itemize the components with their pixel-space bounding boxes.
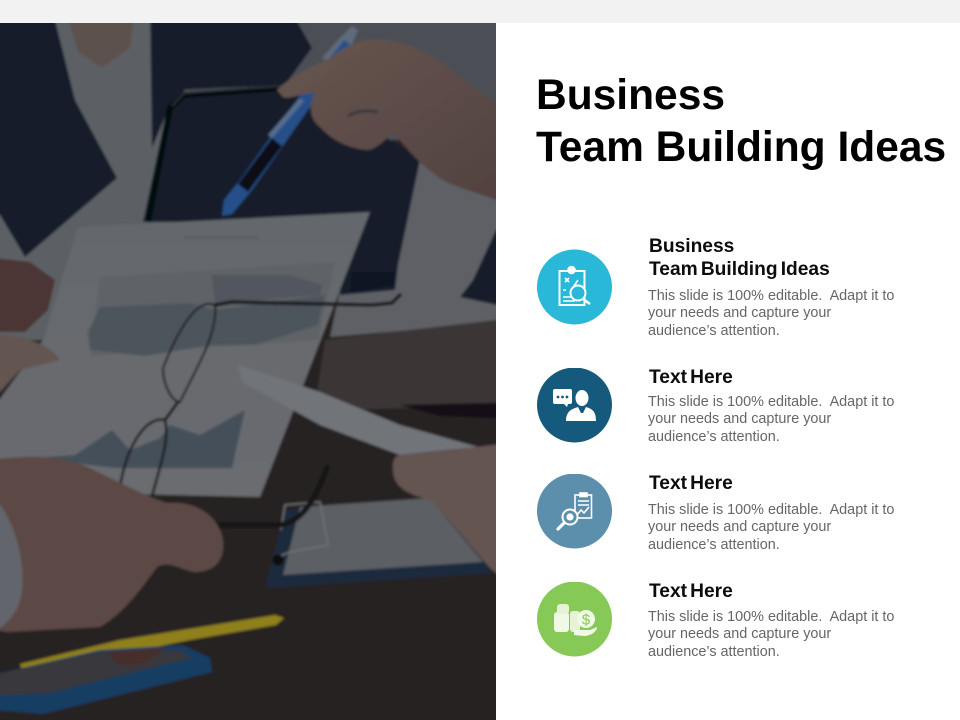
item 1: body text [648, 288, 894, 338]
item 2: body text [648, 394, 894, 444]
lower left hand [0, 457, 223, 632]
document paper with charts [0, 212, 370, 497]
item 1: body text: your needs and capture your [648, 305, 831, 321]
item 3: body text: audience’s attention. [648, 536, 780, 552]
upper right hand [277, 39, 530, 215]
smartphone [0, 645, 212, 714]
item 4: icon circle with coins and hand [537, 582, 612, 656]
item 1: heading: Business [649, 236, 734, 257]
photo background [0, 0, 530, 720]
item 1: icon circle with clipboard and magnifier [537, 250, 612, 324]
item 4: body text [648, 608, 894, 660]
item 2: body text: audience’s attention. [648, 428, 780, 444]
top band [0, 0, 960, 23]
item 1: heading [649, 236, 830, 280]
item 3: body text: your needs and capture your [648, 519, 831, 535]
yellow pencil [20, 615, 284, 670]
suit jacket [0, 0, 530, 312]
lower right hand [393, 440, 530, 590]
item 3: icon circle with report and magnifier [537, 474, 612, 548]
item 3: heading: Text Here [649, 473, 733, 494]
item 3: body text: This slide is 100% editable. Adapt it to [648, 502, 894, 518]
title: Business [536, 72, 725, 118]
pen [222, 26, 358, 216]
item 2: body text: your needs and capture your [648, 411, 831, 427]
title [536, 72, 946, 170]
item 2: body text: This slide is 100% editable. Adapt it to [648, 394, 894, 410]
item 4: body text: your needs and capture your [648, 626, 831, 642]
item 2: icon circle with speech bubble and person [537, 368, 612, 442]
shirt [0, 0, 285, 340]
item 3: body text [648, 502, 894, 552]
eyeglasses [120, 295, 400, 525]
left edge hands [0, 255, 60, 400]
item 4: body text: audience’s attention. [648, 644, 780, 660]
item 4: heading: Text Here [649, 581, 733, 602]
receipt strip [238, 365, 478, 455]
item 1: body text: This slide is 100% editable. Adapt it to [648, 288, 894, 304]
item 1: heading: Team Building Ideas [649, 259, 830, 280]
item 4: body text: This slide is 100% editable. Adapt it to [648, 608, 894, 624]
item 4: icon circle with coins and hand: $ [582, 612, 591, 628]
title: Team Building Ideas [536, 124, 946, 170]
clipboard [267, 498, 493, 588]
item 2: heading: Text Here [649, 367, 733, 388]
item 1: body text: audience’s attention. [648, 322, 780, 338]
laptop [143, 85, 420, 295]
panel: darkened meeting photo [0, 23, 496, 720]
